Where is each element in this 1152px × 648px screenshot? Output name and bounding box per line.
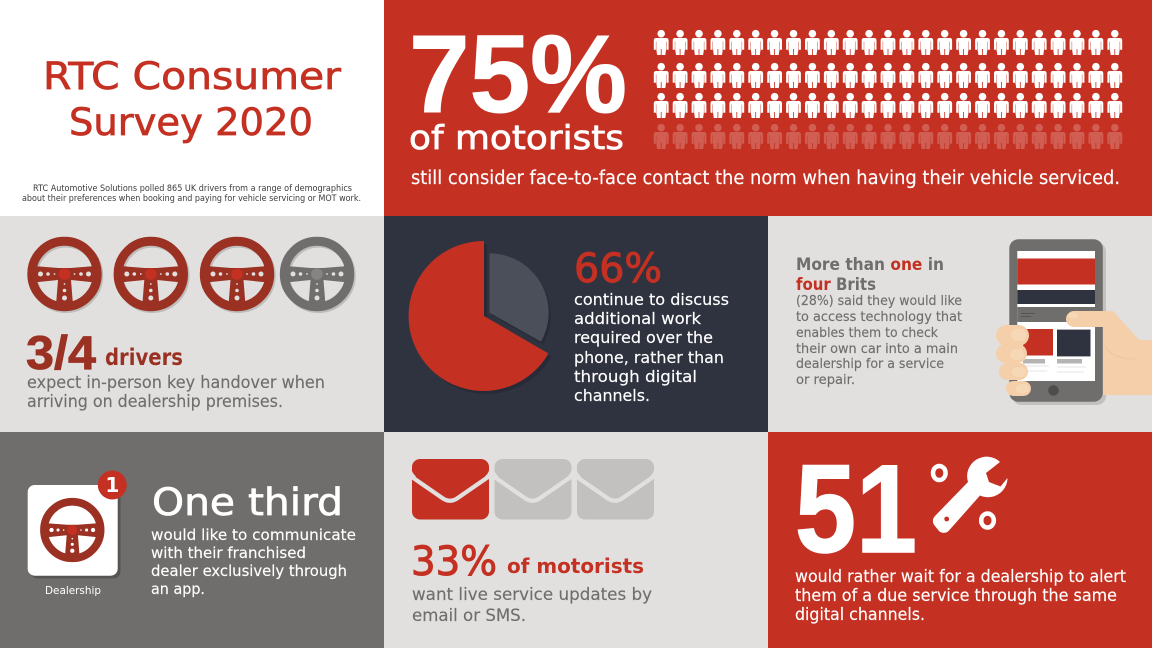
alert text: digital channels. — [795, 605, 925, 624]
check-in technology text: (28%) said they would like — [796, 294, 962, 309]
icon: wrench percent — [933, 457, 1008, 533]
phone discussion text: channels. — [574, 386, 650, 405]
title: RTC Consumer — [43, 55, 342, 98]
heading: more than one in four Brits: four Brits — [796, 275, 876, 295]
phone discussion text: phone, rather than — [574, 348, 724, 367]
check-in technology text: to access technology that — [796, 310, 962, 325]
phone discussion text: through digital — [574, 367, 697, 386]
phone discussion text — [574, 290, 729, 405]
key handover text: arriving on dealership premises. — [27, 392, 283, 411]
check-in technology text — [796, 294, 962, 388]
key handover text: expect in-person key handover when — [27, 373, 325, 392]
live updates text: email or SMS. — [412, 606, 526, 626]
heading: one third: One third — [152, 481, 343, 524]
title — [43, 55, 342, 144]
panel: 66% phone — [384, 216, 768, 432]
live updates text: want live service updates by — [412, 585, 652, 605]
panel: 3/4 drivers — [0, 216, 384, 432]
app communication text: dealer exclusively through — [151, 562, 347, 580]
check-in technology text: or repair. — [796, 373, 855, 388]
survey description: RTC Automotive Solutions polled 865 UK drivers from a range of demographics — [33, 184, 353, 194]
icon: dealership app: Dealership — [45, 584, 101, 597]
pie chart — [409, 241, 552, 394]
heading: 3/4 drivers: 3/4 — [26, 326, 96, 379]
alert text: them of a due service through the same — [795, 586, 1117, 605]
app communication text — [151, 526, 356, 598]
heading: more than one in four Brits: More than one in — [796, 255, 944, 275]
check-in technology text: enables them to check — [796, 326, 938, 341]
stat 33% of motorists: of motorists — [507, 554, 644, 578]
people pictogram — [654, 30, 1122, 149]
big stat 75%: 75% — [409, 13, 627, 136]
phone discussion text: continue to discuss — [574, 290, 729, 309]
heading: 3/4 drivers — [26, 326, 183, 379]
alert text: would rather wait for a dealership to alert — [795, 567, 1126, 586]
app communication text: would like to communicate — [151, 526, 356, 544]
phone discussion text: required over the — [574, 328, 713, 347]
panel: 51% — [768, 432, 1152, 648]
big stat 51: 51 — [795, 440, 917, 579]
app communication text: an app. — [151, 580, 205, 598]
check-in technology text: dealership for a service — [796, 357, 944, 372]
icon: hand holding phone — [996, 239, 1152, 405]
icon: envelopes — [409, 459, 656, 520]
of motorists: of motorists — [409, 118, 624, 157]
check-in technology text: their own car into a main — [796, 342, 958, 357]
icon: dealership app — [28, 470, 127, 597]
alert text — [795, 567, 1126, 624]
icon: dealership app: 1 — [105, 473, 119, 497]
panel: 75% of motorists — [384, 0, 1152, 216]
heading: more than one in four Brits — [796, 255, 944, 295]
title: Survey 2020 — [69, 101, 313, 144]
app communication text: with their franchised — [151, 544, 306, 562]
stat 33% of motorists: 33% — [411, 539, 497, 585]
survey description — [22, 184, 361, 204]
face-to-face statement: still consider face-to-face contact the norm when having their vehicle serviced. — [411, 168, 1120, 189]
stat 33% of motorists — [411, 539, 644, 585]
heading: 3/4 drivers: drivers — [105, 345, 183, 371]
phone discussion text: additional work — [574, 309, 702, 328]
key handover text — [27, 373, 325, 411]
panel: 33% of motorists — [384, 432, 768, 648]
stat 66%: 66% — [574, 246, 662, 292]
icon: steering wheels — [32, 241, 351, 308]
survey description: about their preferences when booking and paying for vehicle servicing or MOT work. — [22, 194, 361, 204]
panel: one in four Brits — [768, 216, 1152, 432]
panel: title — [0, 0, 384, 216]
panel: one third app — [0, 432, 384, 648]
live updates text — [412, 585, 652, 626]
